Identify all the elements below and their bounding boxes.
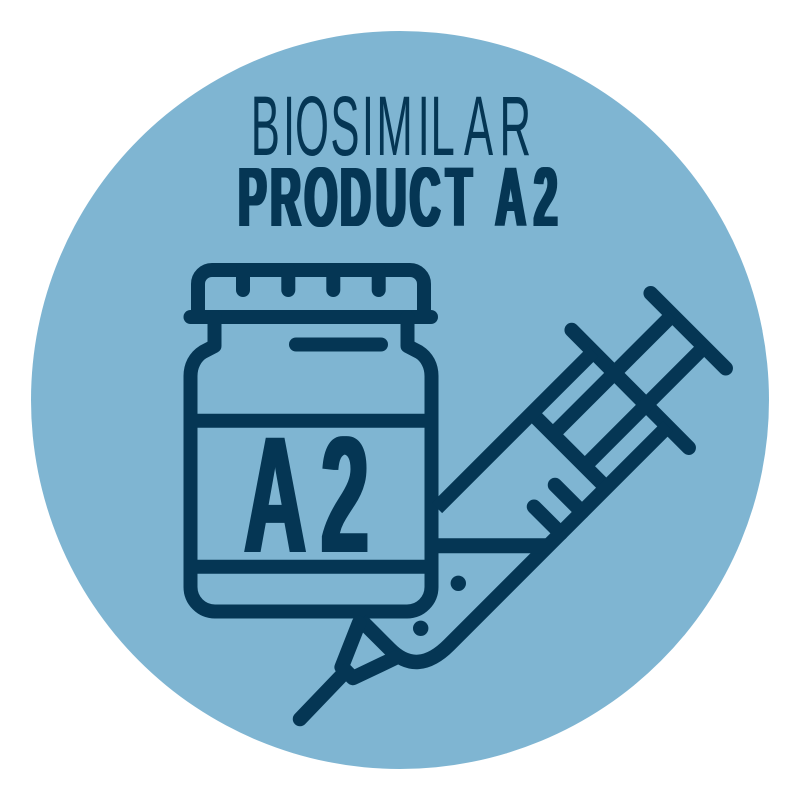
- plunger head: [651, 293, 726, 368]
- icon: syringe: [300, 293, 726, 719]
- graduation marks: [534, 485, 582, 533]
- bubbles: [413, 576, 466, 636]
- barrel lower edge and tip: [361, 426, 668, 662]
- bottle label text: A2: [244, 403, 369, 588]
- cap ridges: [243, 270, 379, 290]
- label top line: [190, 414, 432, 428]
- bottle highlight: [296, 338, 381, 352]
- title: [238, 80, 557, 245]
- title line: product a2: PRODUCT A2: [238, 151, 557, 245]
- barrel upper edge: [437, 352, 593, 508]
- finger flange: [572, 330, 689, 448]
- liquid level: [437, 538, 550, 553]
- cap rim: [190, 310, 431, 324]
- label bottom line: [190, 560, 432, 574]
- icon: bottle: [190, 270, 432, 612]
- hub: [342, 623, 395, 678]
- bottle body: [190, 317, 432, 612]
- bottle cap: [198, 270, 424, 317]
- title line: biosimilar: BIOSIMILAR: [251, 80, 531, 174]
- barrel seal: [532, 413, 606, 488]
- bubble upper: [451, 576, 466, 591]
- needle: [300, 671, 346, 719]
- plunger rods: [553, 315, 704, 466]
- bubble lower: [413, 621, 428, 636]
